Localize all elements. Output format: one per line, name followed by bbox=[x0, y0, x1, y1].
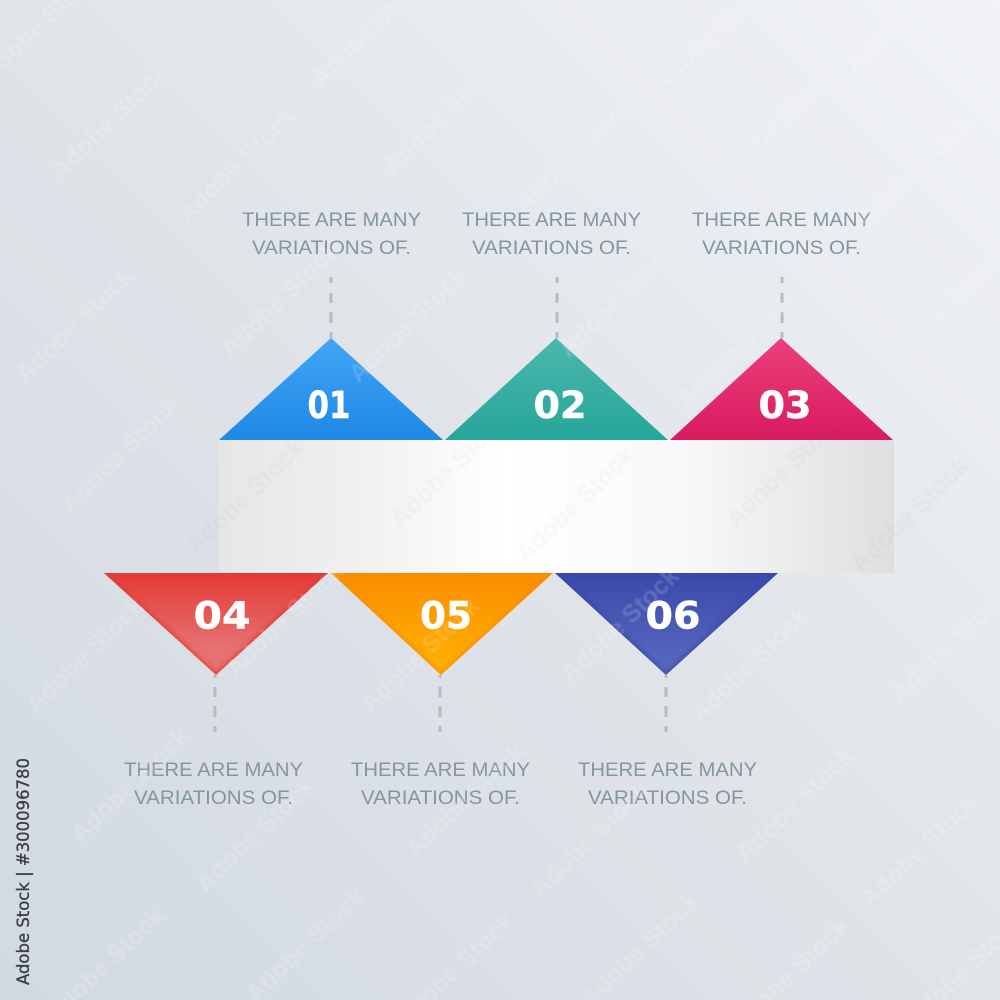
watermark pattern: Adobe Stock bbox=[355, 592, 485, 718]
central white band bbox=[219, 440, 894, 573]
step 02: THERE ARE MANY bbox=[462, 210, 641, 231]
step 01: 01 bbox=[308, 384, 350, 427]
watermark pattern: Adobe Stock bbox=[180, 434, 310, 560]
step 01: THERE ARE MANY bbox=[242, 210, 421, 231]
step 05: VARIATIONS OF. bbox=[361, 788, 520, 809]
watermark pattern: Adobe Stock bbox=[553, 237, 683, 363]
watermark pattern: Adobe Stock bbox=[343, 262, 473, 388]
step 06: 06 bbox=[646, 594, 700, 638]
watermark pattern: Adobe Stock bbox=[845, 452, 975, 578]
step 03: THERE ARE MANY bbox=[692, 210, 871, 231]
watermark pattern: Adobe Stock bbox=[20, 592, 150, 718]
step 04 bbox=[104, 573, 328, 809]
step 05: THERE ARE MANY bbox=[351, 760, 530, 781]
watermark pattern: Adobe Stock bbox=[215, 237, 345, 363]
watermark pattern: Adobe Stock bbox=[220, 557, 350, 683]
watermark pattern: Adobe Stock bbox=[400, 737, 530, 863]
step 06 bbox=[555, 573, 778, 809]
watermark pattern: Adobe Stock bbox=[710, 62, 840, 188]
step 03: VARIATIONS OF. bbox=[702, 238, 861, 259]
step 02: 02 bbox=[534, 384, 586, 427]
step 04: VARIATIONS OF. bbox=[134, 788, 293, 809]
watermark pattern: Adobe Stock bbox=[525, 777, 655, 903]
watermark pattern: Adobe Stock bbox=[190, 772, 320, 898]
watermark pattern: Adobe Stock bbox=[850, 107, 980, 233]
step 06: VARIATIONS OF. bbox=[588, 788, 747, 809]
watermark pattern: Adobe Stock bbox=[45, 59, 175, 185]
step 05 bbox=[331, 573, 553, 809]
step 03 bbox=[670, 210, 893, 440]
watermark pattern: Adobe Stock bbox=[10, 262, 140, 388]
watermark pattern: Adobe Stock bbox=[172, 102, 302, 228]
watermark pattern: Adobe Stock bbox=[555, 562, 685, 688]
step 03: 03 bbox=[758, 384, 812, 427]
watermark pattern: Adobe Stock bbox=[730, 742, 860, 868]
watermark pattern: Adobe Stock bbox=[377, 54, 507, 180]
watermark pattern: Adobe Stock bbox=[670, 287, 800, 413]
step 06: THERE ARE MANY bbox=[578, 760, 757, 781]
watermark pattern: Adobe Stock bbox=[65, 722, 195, 848]
watermark pattern: Adobe Stock bbox=[685, 602, 815, 728]
watermark pattern: Adobe Stock bbox=[855, 787, 985, 913]
step 01 bbox=[219, 210, 443, 440]
watermark pattern: Adobe Stock bbox=[510, 92, 640, 218]
step 02: VARIATIONS OF. bbox=[472, 238, 631, 259]
stock id label: Adobe Stock | #300096780 bbox=[14, 758, 34, 985]
step 05: 05 bbox=[420, 594, 472, 638]
step 04: THERE ARE MANY bbox=[124, 760, 303, 781]
watermark pattern: Adobe Stock bbox=[510, 442, 640, 568]
watermark pattern: Adobe Stock bbox=[385, 407, 515, 533]
step 02 bbox=[445, 210, 668, 440]
step 04: 04 bbox=[194, 594, 250, 638]
watermark pattern: Adobe Stock bbox=[55, 392, 185, 518]
watermark pattern: Adobe Stock bbox=[720, 407, 850, 533]
step 01: VARIATIONS OF. bbox=[252, 238, 411, 259]
